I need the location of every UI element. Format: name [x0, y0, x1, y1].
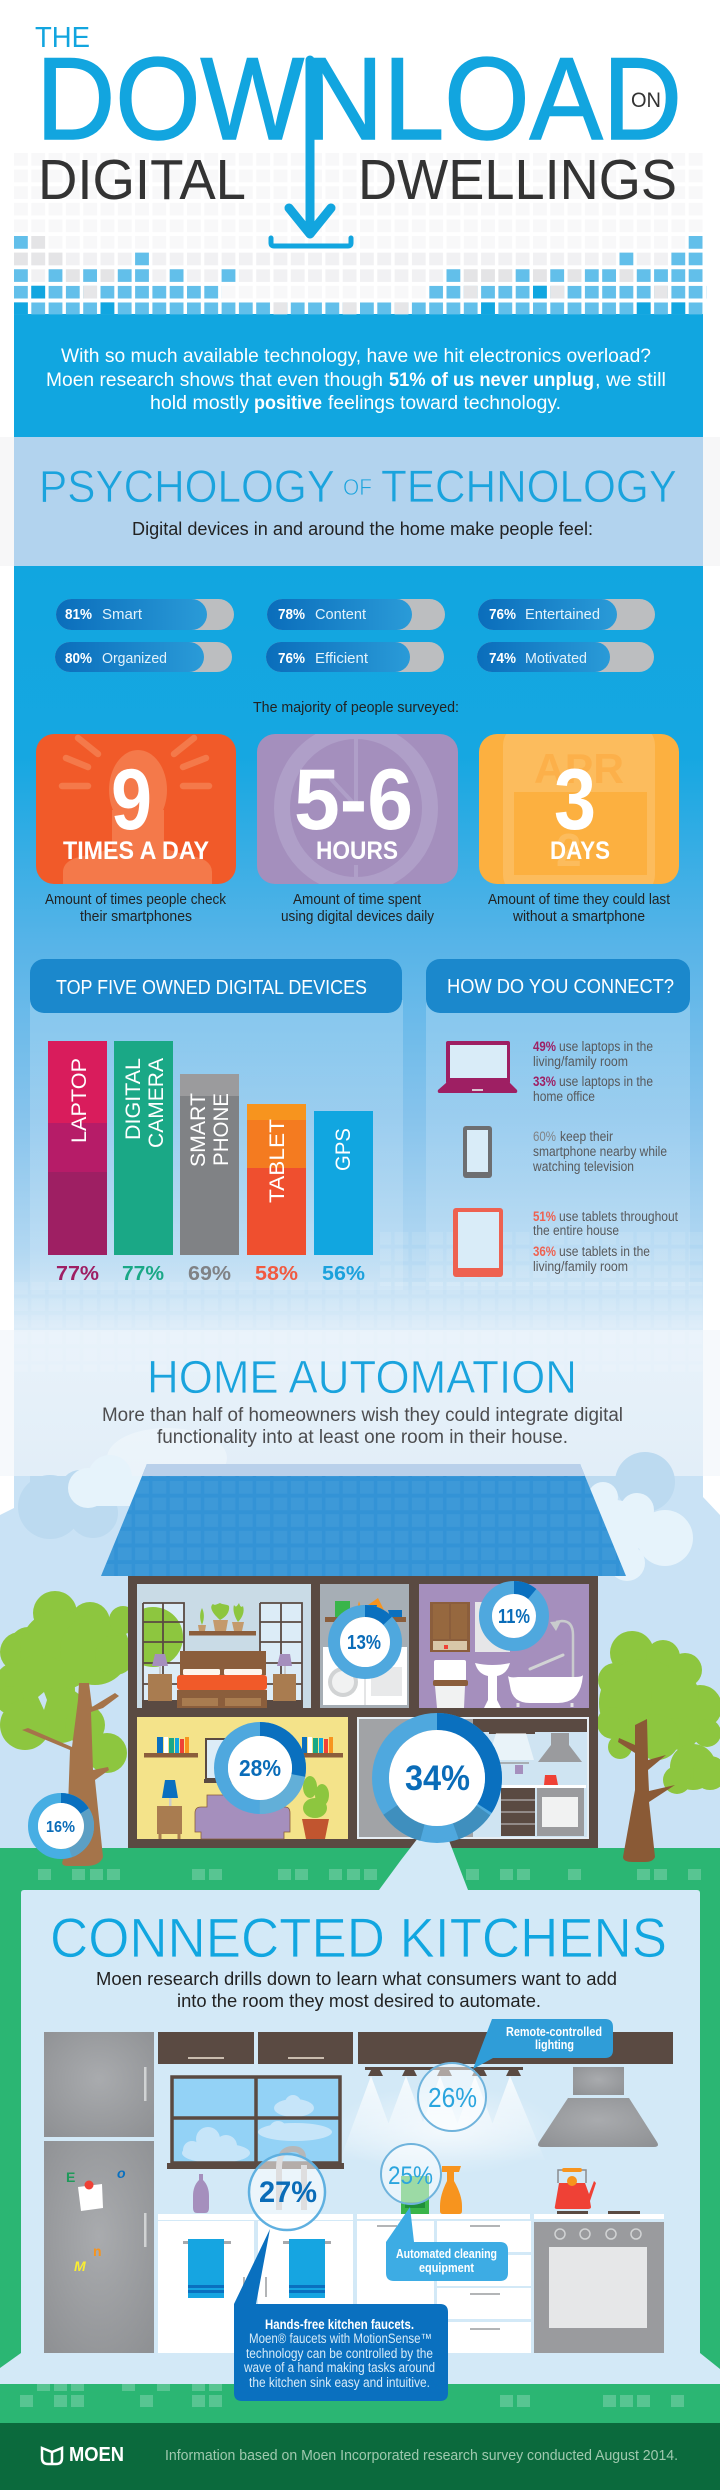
- callout circle: 27 percent: 27%: [259, 2176, 317, 2209]
- pill: efficient: 76%: [278, 650, 305, 667]
- title word: download: DOWNLOAD: [36, 33, 682, 164]
- text: tablet usage: living/family room: [533, 1259, 628, 1274]
- callout circle: 26 percent: 26%: [428, 2082, 477, 2113]
- icon: laptop: [438, 1041, 517, 1093]
- fridge magnets: M: [74, 2258, 86, 2274]
- stat card: 9 times a day: [36, 734, 236, 884]
- intro text: , we still: [595, 370, 666, 391]
- room: kitchen: [357, 1717, 589, 1839]
- logo: moen: [42, 2444, 124, 2466]
- donut: 11 percent: [486, 1588, 542, 1644]
- logo: moen: MOEN: [69, 2444, 124, 2466]
- subtitle: home automation: More than half of homeowners wish they could integrate digital: [102, 1405, 623, 1426]
- bar: digital camera: CAMERA: [145, 1058, 168, 1148]
- callout: remote-controlled lighting: [473, 2019, 613, 2069]
- card captions: Amount of time spent: [293, 892, 421, 908]
- stat card: 9 times a day: 9: [111, 752, 152, 848]
- stat card: 3 days: DAYS: [550, 837, 610, 865]
- stat card: 5-6 hours: 5-6: [294, 752, 413, 848]
- card captions: their smartphones: [80, 909, 192, 925]
- grass pixels: [20, 1869, 701, 2407]
- title: [35, 22, 682, 246]
- pill: organized: [55, 642, 232, 672]
- card captions: Amount of times people check: [45, 892, 227, 908]
- text: laptop usage: 49%: [533, 1039, 556, 1054]
- text: smartphone usage: watching television: [532, 1159, 634, 1174]
- text: smartphone usage: 60%: [533, 1129, 556, 1144]
- bar: tablet: TABLET: [266, 1119, 289, 1203]
- callout: hands-free kitchen faucets: Hands-free kitchen faucets.: [265, 2317, 414, 2332]
- tree: left: [0, 1591, 137, 1866]
- stat card: 5-6 hours: [257, 731, 458, 885]
- fridge: [44, 2032, 154, 2353]
- donut: 28 percent: 28%: [239, 1755, 281, 1781]
- pill: content: 78%: [278, 606, 305, 623]
- fridge magnets: n: [93, 2243, 102, 2259]
- stat card: 9 times a day: TIMES A DAY: [63, 837, 209, 865]
- text: tablet usage: the entire house: [533, 1223, 619, 1238]
- callout: hands-free kitchen faucets: the kitchen sink easy and intuitive.: [249, 2375, 430, 2390]
- card captions: [45, 892, 670, 925]
- track lights: [329, 2067, 559, 2175]
- intro text: [46, 346, 666, 414]
- fridge magnets: E: [66, 2169, 75, 2185]
- stat card: 3 days: APR: [534, 745, 624, 792]
- stat card: 3 days: [479, 734, 679, 884]
- pill: smart: [56, 599, 234, 630]
- panel header: devices: [30, 959, 402, 1013]
- pill: efficient: [266, 642, 444, 672]
- bar: smart phone: PHONE: [210, 1093, 233, 1166]
- text: tablet usage: 51%: [533, 1209, 556, 1224]
- title word: dwellings: DWELLINGS: [358, 148, 677, 212]
- faucet: [279, 2149, 304, 2210]
- text: smartphone usage: smartphone nearby while: [533, 1144, 667, 1159]
- donut: 13 percent: 13%: [347, 1632, 381, 1654]
- bar: laptop: LAPTOP: [68, 1058, 91, 1143]
- fridge magnets: o: [117, 2165, 126, 2181]
- bar: tablet: [247, 1104, 306, 1255]
- donut: 28 percent: [215, 1723, 305, 1813]
- callout: automated cleaning equipment: [386, 2207, 508, 2281]
- donut: 16 percent: [22, 1787, 100, 1865]
- card captions: using digital devices daily: [281, 909, 435, 925]
- bar: gps: [314, 1111, 373, 1255]
- title word: the: THE: [35, 22, 90, 54]
- sky and clouds: [0, 1428, 720, 1851]
- bar values: 77%: [56, 1263, 99, 1285]
- stove: [534, 2211, 664, 2353]
- intro text: 51% of us never unplug: [389, 370, 594, 391]
- subtitle: home automation: functionality into at least one room in their house.: [157, 1427, 568, 1448]
- upper cabinets: [158, 2032, 673, 2064]
- pill: smart: Smart: [102, 606, 143, 623]
- grass: [0, 1848, 720, 2423]
- stat card: 5-6 hours: HOURS: [316, 837, 398, 865]
- heading: connected kitchens: CONNECTED KITCHENS: [50, 1906, 667, 1969]
- bar values: 69%: [188, 1263, 231, 1285]
- intro text: Moen research shows that even though: [46, 370, 383, 391]
- bar values: 58%: [255, 1263, 298, 1285]
- panel header: connect: [426, 959, 690, 1013]
- callout: remote-controlled lighting: Remote-controlled: [506, 2024, 602, 2039]
- callout circle: 25 percent: [381, 2144, 441, 2204]
- text: laptop usage: [533, 1039, 653, 1104]
- bar: digital camera: [114, 1041, 173, 1255]
- pill: organized: 80%: [65, 650, 92, 667]
- title word: on: ON: [631, 89, 661, 112]
- callout: automated cleaning equipment: Automated cleaning: [396, 2246, 497, 2261]
- pill: entertained: [478, 599, 655, 630]
- text: laptop usage: home office: [533, 1089, 595, 1104]
- text: tablet usage: use tablets throughout: [559, 1209, 678, 1224]
- text: majority of people surveyed: The majority of people surveyed:: [253, 700, 459, 716]
- vase: [193, 2174, 209, 2213]
- house: [101, 1464, 626, 1848]
- title word: digital: DIGITAL: [38, 148, 246, 212]
- icon: tablet: [453, 1208, 503, 1277]
- text: laptop usage: 33%: [533, 1074, 556, 1089]
- callout: hands-free kitchen faucets: Moen® faucets with MotionSense™: [249, 2331, 432, 2346]
- callout: remote-controlled lighting: lighting: [535, 2037, 574, 2052]
- text: laptop usage: use laptops in the: [559, 1074, 653, 1089]
- subtitle: connected kitchens: into the room they most desired to automate.: [177, 1991, 541, 2011]
- icon: download arrow: [271, 60, 351, 246]
- bar: smart phone: [180, 1074, 239, 1255]
- text: laptop usage: use laptops in the: [559, 1039, 653, 1054]
- heading: psychology of technology: OF: [343, 474, 372, 500]
- room: laundry: [320, 1584, 409, 1708]
- intro text: feelings toward technology.: [328, 393, 561, 414]
- intro text: positive: [254, 393, 322, 414]
- text: smartphone usage: keep their: [560, 1129, 613, 1144]
- bar chart: [48, 1041, 373, 1285]
- stat card: 3 days: 2: [556, 824, 582, 876]
- intro text: hold mostly: [150, 393, 249, 414]
- pill: organized: Organized: [102, 650, 167, 667]
- pill: entertained: Entertained: [525, 606, 600, 623]
- text: laptop usage: living/family room: [533, 1054, 628, 1069]
- callout circle: 25 percent: 25%: [388, 2162, 433, 2190]
- bar: digital camera: DIGITAL: [122, 1058, 145, 1140]
- cleaning supplies: [401, 2166, 462, 2214]
- fridge magnets: [66, 2165, 126, 2274]
- donut: 13 percent: [334, 1611, 396, 1673]
- bar values: [56, 1263, 365, 1285]
- pill: content: Content: [315, 606, 367, 623]
- panel: how do you connect: [426, 959, 690, 1290]
- heading: psychology of technology: PSYCHOLOGY: [39, 461, 335, 512]
- callout circle: 27 percent: [249, 2154, 325, 2230]
- card captions: Amount of time they could last: [488, 892, 670, 908]
- donut: 34 percent: [358, 1699, 516, 1857]
- room: bathroom: [419, 1584, 589, 1708]
- bar values: 77%: [122, 1263, 164, 1285]
- counters and cabinets: [158, 2214, 531, 2353]
- footer: [0, 2423, 720, 2490]
- kettle: [555, 2168, 596, 2209]
- pill stats: [55, 599, 655, 672]
- panel header: devices: TOP FIVE OWNED DIGITAL DEVICES: [56, 977, 367, 999]
- text: tablet usage: use tablets in the: [559, 1244, 650, 1259]
- text: tablet usage: 36%: [533, 1244, 556, 1259]
- callout: automated cleaning equipment: equipment: [419, 2260, 475, 2275]
- text: tablet usage: [533, 1209, 678, 1274]
- room: living room: [137, 1717, 348, 1839]
- path to kitchen panel: [379, 1838, 468, 1890]
- pill: motivated: [477, 642, 654, 672]
- bar: gps: GPS: [332, 1128, 355, 1171]
- donut: 11 percent: 11%: [498, 1606, 530, 1628]
- bar values: 56%: [322, 1263, 365, 1285]
- range hood: [538, 2067, 658, 2147]
- callout: hands-free kitchen faucets: [234, 2229, 448, 2401]
- house walls: [128, 1576, 598, 1848]
- card captions: without a smartphone: [512, 909, 645, 925]
- heading: psychology of technology: [39, 461, 677, 512]
- stat card: 3 days: 3: [554, 752, 596, 848]
- pill: efficient: Efficient: [315, 650, 369, 667]
- heading: home automation: HOME AUTOMATION: [147, 1351, 577, 1403]
- pill: smart: 81%: [65, 606, 92, 623]
- panel header: connect: HOW DO YOU CONNECT?: [447, 976, 674, 998]
- window: [167, 2076, 344, 2169]
- text: smartphone usage: [532, 1129, 667, 1174]
- subtitle: connected kitchens: [96, 1969, 617, 2011]
- bar: laptop: [48, 1041, 107, 1255]
- heading: psychology of technology: TECHNOLOGY: [381, 461, 677, 512]
- text: source note: Information based on Moen Incorporated research survey conducted August 2014.: [165, 2447, 678, 2464]
- pixel grid backdrop: [14, 153, 706, 314]
- donut: 34 percent: 34%: [405, 1759, 470, 1798]
- callout: hands-free kitchen faucets: wave of a hand making tasks around: [243, 2360, 435, 2375]
- icon: smartphone: [463, 1126, 492, 1178]
- background: page columns: [0, 314, 720, 1476]
- room: bedroom: [123, 1584, 311, 1708]
- intro text: With so much available technology, have we hit electronics overload?: [61, 346, 651, 367]
- pill: motivated: Motivated: [525, 650, 587, 667]
- towels: [183, 2239, 331, 2298]
- callout: hands-free kitchen faucets: technology can be controlled by the: [246, 2346, 433, 2361]
- pill: content: [267, 599, 445, 630]
- subtitle: home automation: [102, 1405, 623, 1448]
- pill: motivated: 74%: [489, 650, 516, 667]
- tree: right: [597, 1631, 720, 1862]
- panel: top five owned digital devices: [30, 959, 403, 1290]
- donut: 16 percent: 16%: [46, 1819, 75, 1836]
- pill: entertained: 76%: [489, 606, 516, 623]
- callout circle: 26 percent: [418, 2063, 486, 2131]
- roof: [101, 1464, 626, 1576]
- subtitle: feelings intro: Digital devices in and around the home make people feel:: [132, 519, 593, 539]
- panel: connected kitchens: [0, 1890, 720, 2384]
- bar: smart phone: SMART: [187, 1093, 210, 1167]
- subtitle: connected kitchens: Moen research drills down to learn what consumers want to add: [96, 1969, 617, 1989]
